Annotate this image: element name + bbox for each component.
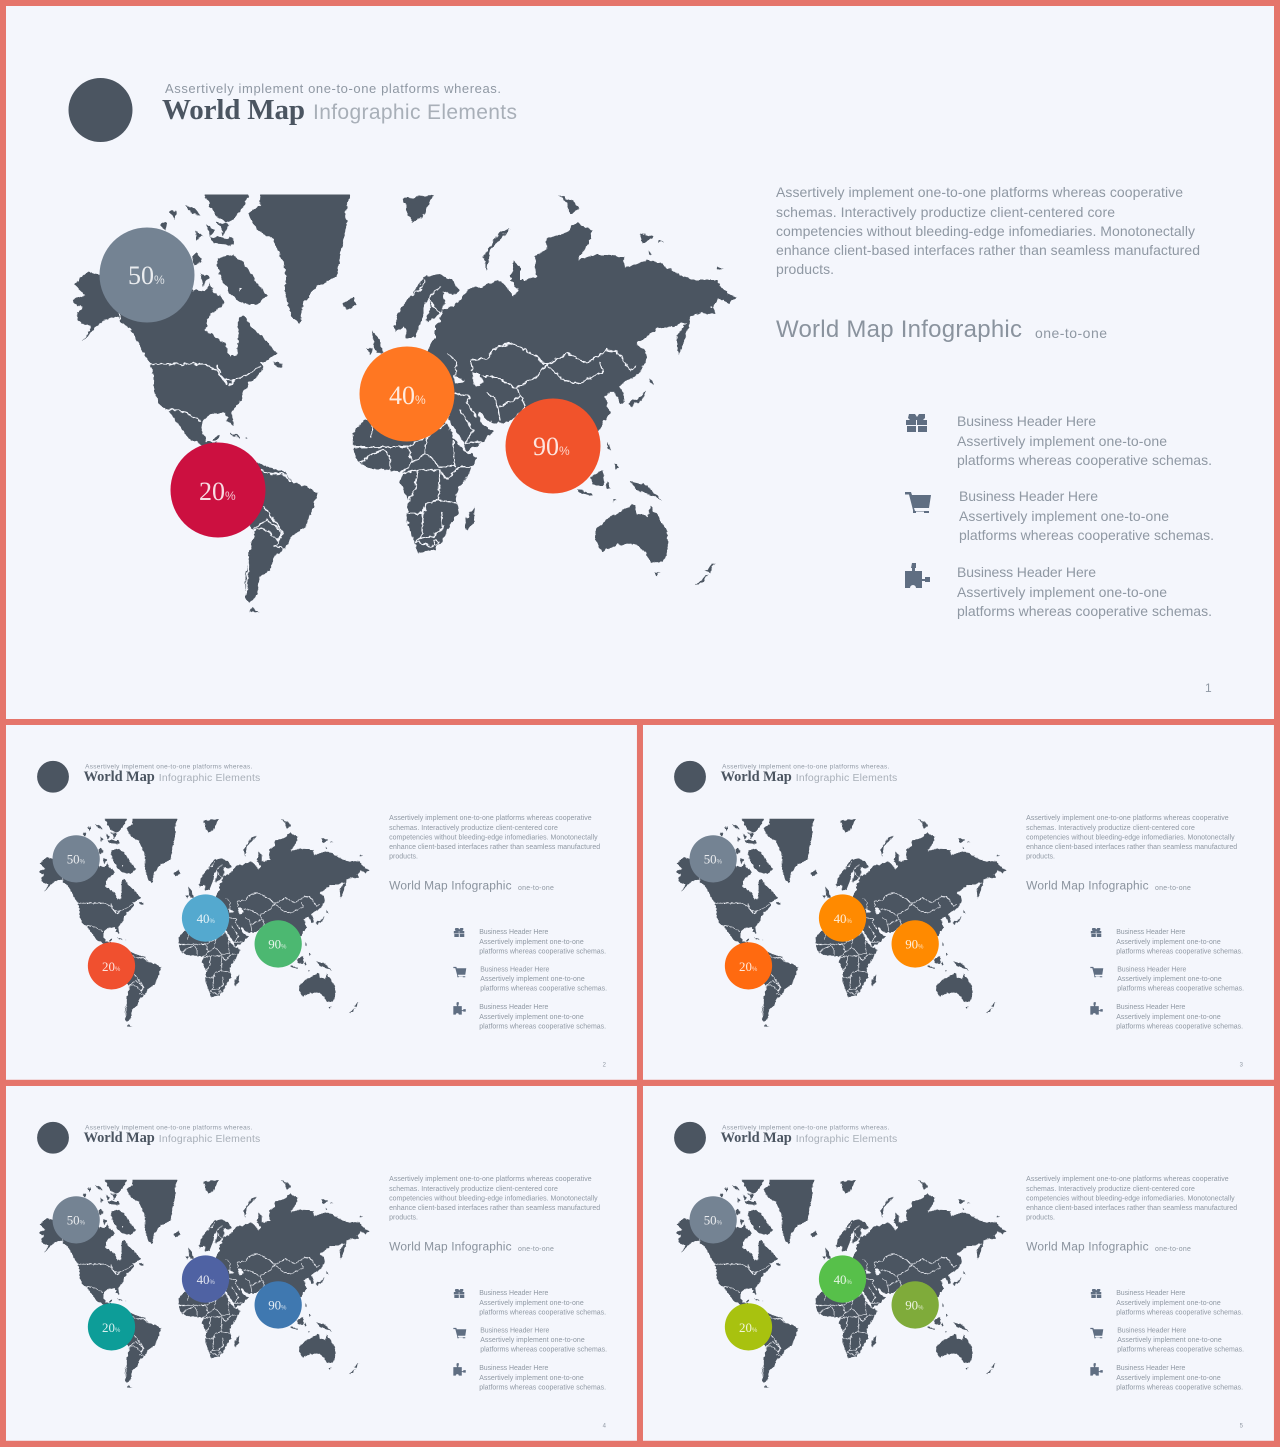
bubble: 20 percent [170, 442, 266, 538]
feature item 1: Assertively implement one-to-one [479, 1300, 584, 1307]
feature item 2 [959, 488, 1214, 543]
title block: Assertively implement one-to-one platforms whereas. [165, 81, 501, 96]
bubble: 40 percent: 40% [834, 1272, 852, 1287]
paragraph: enhance client-based interfaces rather than seamless manufactured [1026, 844, 1237, 851]
title block: World Map [721, 769, 792, 785]
feature item 3: Business Header Here [1116, 1365, 1185, 1372]
bubble: 20 percent: 20% [199, 477, 236, 506]
feature item 2: Assertively implement one-to-one [1117, 976, 1222, 983]
logo circle [674, 761, 706, 793]
bubble: 50 percent: 50% [704, 851, 723, 866]
feature item 3: Business Header Here [957, 564, 1096, 580]
feature item 1: platforms whereas cooperative schemas. [1116, 948, 1243, 955]
bubble: 50 percent [53, 1196, 100, 1243]
paragraph: Assertively implement one-to-one platforms whereas cooperative [1026, 1176, 1229, 1183]
feature item 2: Business Header Here [1117, 966, 1186, 973]
bubble: 20 percent [88, 942, 135, 989]
section heading: one-to-one [1155, 885, 1191, 892]
title block: Assertively implement one-to-one platforms whereas. [722, 763, 890, 770]
bubble: 50 percent [53, 835, 100, 882]
feature item 2 [1117, 1327, 1244, 1354]
feature item 1 [479, 1290, 606, 1316]
bubble: 50 percent [690, 1196, 737, 1243]
logo circle [674, 1122, 706, 1154]
paragraph: products. [776, 261, 834, 277]
paragraph: schemas. Interactively productize client-centered core [389, 825, 558, 832]
feature item 3: Assertively implement one-to-one [1116, 1014, 1221, 1021]
feature item 1: platforms whereas cooperative schemas. [957, 452, 1212, 468]
feature item 2: Business Header Here [1117, 1327, 1186, 1334]
world map [72, 190, 737, 613]
feature item 2: Business Header Here [480, 1327, 549, 1334]
bubble: 90 percent [255, 1281, 302, 1329]
logo circle [37, 1122, 69, 1154]
icon: puzzle [905, 563, 930, 588]
paragraph: Assertively implement one-to-one platforms whereas cooperative [776, 184, 1183, 200]
bubble: 90 percent [506, 398, 600, 494]
section heading: World Map Infographic [1026, 1240, 1149, 1254]
feature item 3: Assertively implement one-to-one [957, 584, 1167, 600]
title block [84, 763, 260, 785]
feature item 3: platforms whereas cooperative schemas. [1116, 1385, 1243, 1392]
feature item 3 [1116, 1004, 1243, 1031]
bubble: 20 percent: 20% [102, 959, 121, 974]
bubble: 90 percent: 90% [268, 1297, 287, 1312]
icon: cart [453, 967, 466, 977]
feature item 2: platforms whereas cooperative schemas. [959, 527, 1214, 543]
title block: Assertively implement one-to-one platforms whereas. [85, 763, 253, 770]
section heading: one-to-one [518, 885, 554, 892]
feature item 2: platforms whereas cooperative schemas. [480, 1347, 607, 1354]
feature item 1: Business Header Here [957, 413, 1096, 429]
title block: Infographic Elements [313, 101, 517, 124]
feature item 1: platforms whereas cooperative schemas. [479, 948, 606, 955]
feature item 1: Business Header Here [479, 1290, 548, 1297]
feature item 3: Assertively implement one-to-one [479, 1375, 584, 1382]
paragraph: products. [1026, 1214, 1055, 1221]
paragraph: Assertively implement one-to-one platforms whereas cooperative [389, 815, 592, 822]
paragraph: schemas. Interactively productize client-centered core [389, 1186, 558, 1193]
feature item 2: Business Header Here [959, 488, 1098, 504]
paragraph [776, 184, 1200, 277]
paragraph: enhance client-based interfaces rather than seamless manufactured [389, 1205, 600, 1212]
feature item 2: Assertively implement one-to-one [959, 508, 1169, 524]
feature item 2: platforms whereas cooperative schemas. [1117, 1347, 1244, 1354]
world map [676, 817, 1007, 1027]
paragraph: competencies without bleeding-edge infomediaries. Monotonectally [389, 834, 598, 841]
panel: slide 1 main [6, 6, 1274, 719]
paragraph: enhance client-based interfaces rather than seamless manufactured [776, 242, 1200, 258]
title block: Assertively implement one-to-one platforms whereas. [85, 1124, 253, 1131]
paragraph: schemas. Interactively productize client-centered core [1026, 825, 1195, 832]
paragraph [1026, 815, 1237, 860]
paragraph [1026, 1176, 1237, 1221]
bubble: 40 percent [182, 894, 229, 942]
title block: World Map [162, 94, 305, 126]
feature item 3: Business Header Here [479, 1004, 548, 1011]
icon: puzzle [1090, 1002, 1103, 1015]
title block [84, 1124, 260, 1146]
logo circle [68, 78, 132, 142]
paragraph: schemas. Interactively productize client-centered core [1026, 1186, 1195, 1193]
bubble: 40 percent: 40% [197, 911, 215, 926]
feature item 3: Business Header Here [479, 1365, 548, 1372]
section heading: World Map Infographic [1026, 879, 1149, 893]
feature item 1 [1116, 929, 1243, 955]
icon: gift [906, 414, 927, 432]
feature item 2: Assertively implement one-to-one [1117, 1337, 1222, 1344]
panel: slide 2 [6, 725, 637, 1080]
icon: gift [454, 928, 464, 937]
feature item 3 [479, 1365, 606, 1392]
title block [162, 81, 517, 126]
bubble: 20 percent: 20% [739, 1320, 758, 1335]
world map [39, 817, 370, 1027]
feature item 3: Assertively implement one-to-one [1116, 1375, 1221, 1382]
paragraph: enhance client-based interfaces rather than seamless manufactured [389, 844, 600, 851]
paragraph: competencies without bleeding-edge infomediaries. Monotonectally [776, 223, 1195, 239]
feature item 3: platforms whereas cooperative schemas. [957, 603, 1212, 619]
bubble: 40 percent: 40% [389, 381, 426, 410]
icon: puzzle [453, 1363, 466, 1376]
title block [721, 1124, 897, 1146]
feature item 2: Business Header Here [480, 966, 549, 973]
title block: Infographic Elements [159, 773, 260, 784]
page number: 5 [1240, 1423, 1244, 1429]
feature item 1: Assertively implement one-to-one [479, 939, 584, 946]
feature item 1 [1116, 1290, 1243, 1316]
bubble: 50 percent [100, 228, 194, 322]
feature item 1: Business Header Here [1116, 929, 1185, 936]
title block: Infographic Elements [796, 1134, 897, 1145]
feature item 1: Assertively implement one-to-one [1116, 1300, 1221, 1307]
feature item 2 [1117, 966, 1244, 993]
icon: gift [1091, 928, 1101, 937]
paragraph: Assertively implement one-to-one platforms whereas cooperative [389, 1176, 592, 1183]
paragraph [389, 1176, 600, 1221]
bubble: 20 percent [725, 942, 772, 989]
page number: 3 [1240, 1062, 1244, 1068]
feature item 3: Business Header Here [1116, 1004, 1185, 1011]
icon: gift [1091, 1289, 1101, 1298]
bubble: 40 percent [819, 894, 866, 942]
bubble: 90 percent [892, 920, 939, 968]
bubble: 40 percent [360, 346, 454, 442]
page number: 1 [1205, 681, 1212, 695]
bubble: 40 percent: 40% [834, 911, 852, 926]
paragraph: products. [389, 853, 418, 860]
bubble: 50 percent: 50% [67, 851, 86, 866]
feature item 3: platforms whereas cooperative schemas. [479, 1024, 606, 1031]
bubble: 50 percent [690, 835, 737, 882]
bubble: 50 percent: 50% [67, 1212, 86, 1227]
icon: cart [1090, 1328, 1103, 1338]
feature item 3 [1116, 1365, 1243, 1392]
feature item 1: Assertively implement one-to-one [1116, 939, 1221, 946]
feature item 1 [479, 929, 606, 955]
logo circle [37, 761, 69, 793]
section heading: one-to-one [1155, 1246, 1191, 1253]
world map [39, 1178, 370, 1388]
paragraph: competencies without bleeding-edge infomediaries. Monotonectally [1026, 834, 1235, 841]
icon: puzzle [1090, 1363, 1103, 1376]
bubble: 50 percent: 50% [128, 261, 165, 290]
bubble: 90 percent [255, 920, 302, 968]
title block: World Map [84, 1130, 155, 1146]
bubble: 50 percent: 50% [704, 1212, 723, 1227]
icon: cart [1090, 967, 1103, 977]
bubble: 90 percent [892, 1281, 939, 1329]
feature item 3: platforms whereas cooperative schemas. [479, 1385, 606, 1392]
paragraph: competencies without bleeding-edge infomediaries. Monotonectally [389, 1195, 598, 1202]
bubble: 40 percent [819, 1255, 866, 1303]
title block [721, 763, 897, 785]
title block: World Map [84, 769, 155, 785]
section heading: World Map Infographic [389, 879, 512, 893]
bubble: 40 percent: 40% [197, 1272, 215, 1287]
feature item 3: Assertively implement one-to-one [479, 1014, 584, 1021]
paragraph: products. [1026, 853, 1055, 860]
bubble: 20 percent: 20% [739, 959, 758, 974]
paragraph: Assertively implement one-to-one platforms whereas cooperative [1026, 815, 1229, 822]
title block: Infographic Elements [159, 1134, 260, 1145]
section heading: one-to-one [518, 1246, 554, 1253]
feature item 2: platforms whereas cooperative schemas. [1117, 986, 1244, 993]
page number: 4 [603, 1423, 607, 1429]
bubble: 90 percent: 90% [905, 1297, 924, 1312]
panel: slide 4 [6, 1086, 637, 1441]
feature item 1: Business Header Here [479, 929, 548, 936]
section heading: one-to-one [1035, 325, 1107, 341]
feature item 2: Assertively implement one-to-one [480, 1337, 585, 1344]
feature item 2: platforms whereas cooperative schemas. [480, 986, 607, 993]
bubble: 90 percent: 90% [533, 432, 570, 461]
panel: slide 5 [643, 1086, 1274, 1441]
title block: World Map [721, 1130, 792, 1146]
bubble: 90 percent: 90% [268, 936, 287, 951]
feature item 2 [480, 966, 607, 993]
bubble: 20 percent [88, 1303, 135, 1350]
title block: Infographic Elements [796, 773, 897, 784]
feature item 2: Assertively implement one-to-one [480, 976, 585, 983]
icon: cart [905, 492, 931, 513]
section heading: World Map Infographic [389, 1240, 512, 1254]
feature item 1: platforms whereas cooperative schemas. [479, 1309, 606, 1316]
icon: puzzle [453, 1002, 466, 1015]
page number: 2 [603, 1062, 607, 1068]
paragraph: products. [389, 1214, 418, 1221]
paragraph: schemas. Interactively productize client-centered core [776, 204, 1115, 220]
paragraph: enhance client-based interfaces rather than seamless manufactured [1026, 1205, 1237, 1212]
feature item 3 [479, 1004, 606, 1031]
section heading: World Map Infographic [776, 316, 1022, 343]
feature item 1: Assertively implement one-to-one [957, 433, 1167, 449]
panel: slide 3 [643, 725, 1274, 1080]
paragraph [389, 815, 600, 860]
bubble: 20 percent: 20% [102, 1320, 121, 1335]
icon: cart [453, 1328, 466, 1338]
bubble: 40 percent [182, 1255, 229, 1303]
paragraph: competencies without bleeding-edge infomediaries. Monotonectally [1026, 1195, 1235, 1202]
feature item 1 [957, 413, 1212, 468]
feature item 1: Business Header Here [1116, 1290, 1185, 1297]
feature item 3: platforms whereas cooperative schemas. [1116, 1024, 1243, 1031]
title block: Assertively implement one-to-one platforms whereas. [722, 1124, 890, 1131]
feature item 1: platforms whereas cooperative schemas. [1116, 1309, 1243, 1316]
bubble: 20 percent [725, 1303, 772, 1350]
icon: gift [454, 1289, 464, 1298]
feature item 3 [957, 564, 1212, 619]
feature item 2 [480, 1327, 607, 1354]
world map [676, 1178, 1007, 1388]
bubble: 90 percent: 90% [905, 936, 924, 951]
